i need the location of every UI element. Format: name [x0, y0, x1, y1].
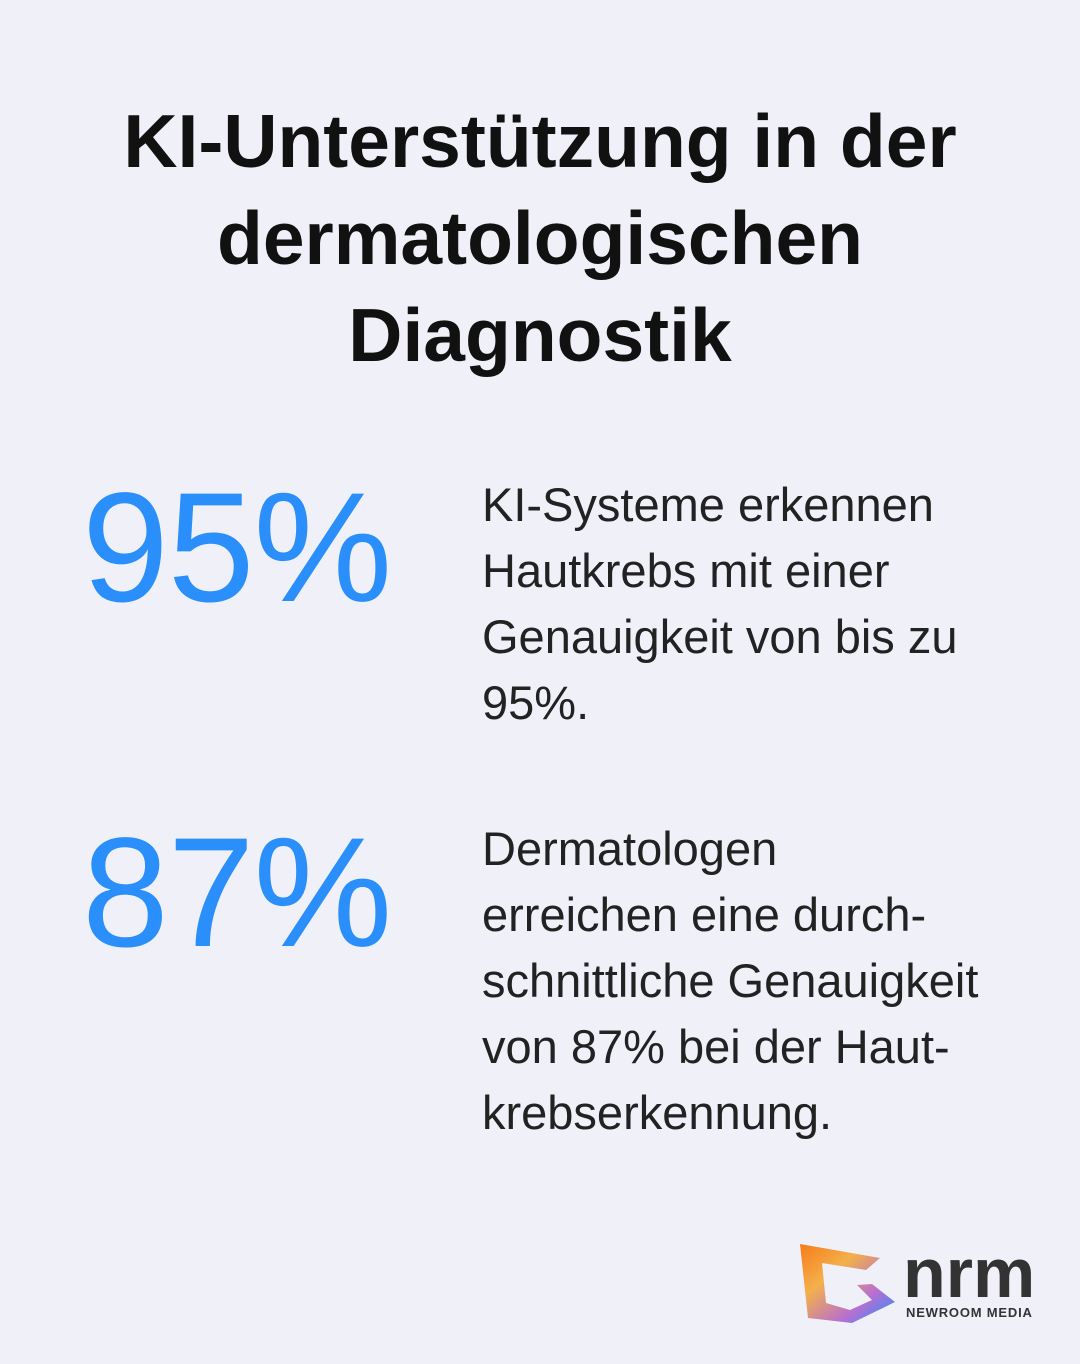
stat: 95%: 95% [82, 461, 391, 635]
icon: logo mark [800, 1244, 895, 1323]
text: 95% description: Genauigkeit von bis zu [482, 610, 958, 663]
text: 95% description: KI-Systeme erkennen [482, 478, 934, 531]
title: KI-Unterstützung in der [123, 99, 957, 183]
stat: 87%: 87% [82, 806, 391, 980]
text: 87% description [482, 822, 978, 1139]
text: 87% description: von 87% bei der Haut- [482, 1020, 950, 1073]
logo text: NEWROOM MEDIA [906, 1305, 1033, 1320]
text: 87% description: erreichen eine durch- [482, 888, 926, 941]
title: dermatologischen [217, 196, 863, 280]
text: 95% description [482, 478, 958, 729]
text: 95% description: 95%. [482, 676, 589, 729]
text: 87% description: krebserkennung. [482, 1086, 832, 1139]
text: 87% description: schnittliche Genauigkeit [482, 954, 978, 1007]
title: Diagnostik [348, 293, 732, 377]
logo [800, 1240, 1035, 1323]
text: 95% description: Hautkrebs mit einer [482, 544, 890, 597]
title [123, 99, 957, 377]
text: 87% description: Dermatologen [482, 822, 777, 875]
